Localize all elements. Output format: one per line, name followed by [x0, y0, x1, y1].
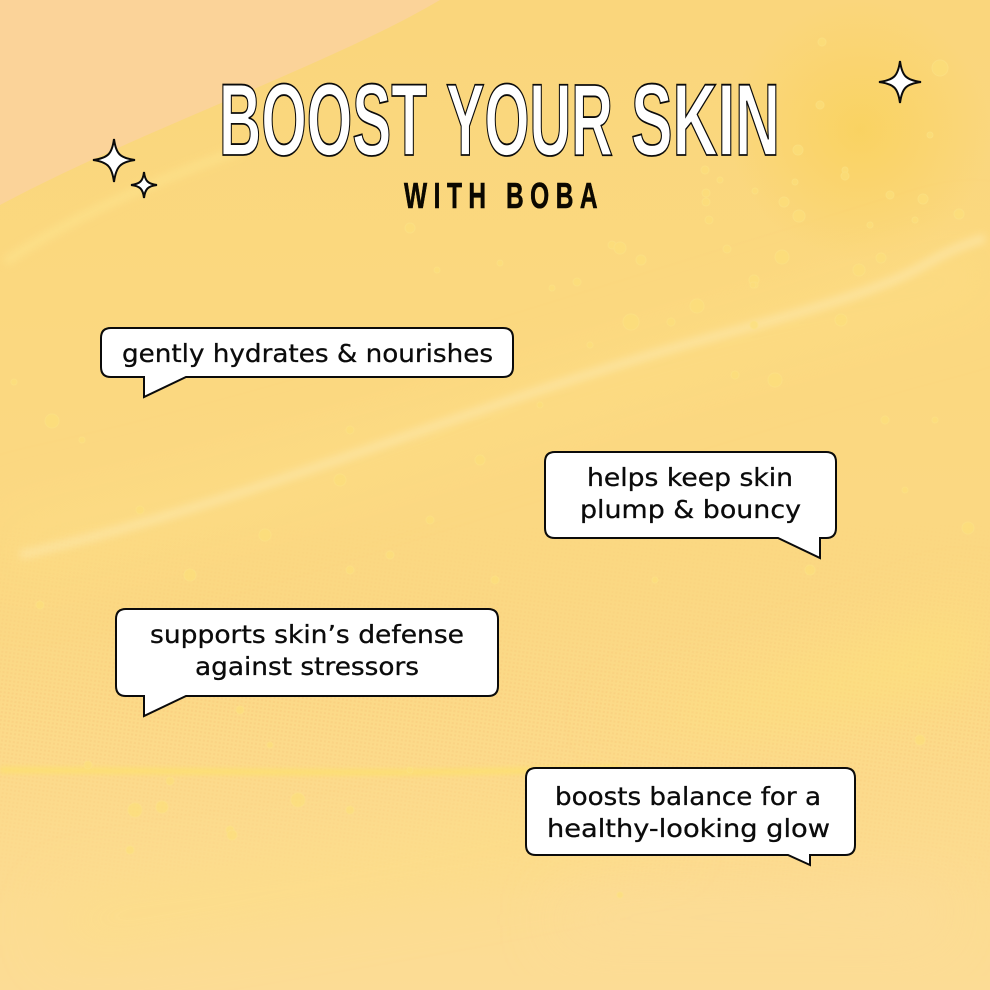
title: SKIN	[631, 63, 780, 177]
callout: plump and bouncy: plump & bouncy	[580, 495, 801, 524]
icon: small sparkle left	[131, 172, 157, 198]
callout: gently hydrates: gently hydrates & nourishes	[122, 339, 493, 368]
callout: healthy glow: healthy-looking glow	[547, 814, 830, 843]
callout: skin defense: against stressors	[195, 652, 419, 681]
callout: plump and bouncy: helps keep skin	[587, 463, 793, 492]
icon: large sparkle left	[93, 139, 135, 182]
callout: skin defense	[116, 609, 498, 716]
callout: healthy glow: boosts balance for a	[555, 782, 821, 811]
icon: sparkle right	[879, 61, 921, 103]
title: YOUR	[446, 63, 613, 177]
callout: plump and bouncy	[545, 452, 836, 558]
callout: skin defense: supports skin’s defense	[150, 620, 464, 649]
subtitle: WITH BOBA	[404, 175, 604, 216]
title: BOOST	[219, 63, 427, 177]
title	[219, 63, 780, 177]
callout: gently hydrates	[101, 328, 513, 397]
callout: healthy glow	[526, 768, 855, 865]
